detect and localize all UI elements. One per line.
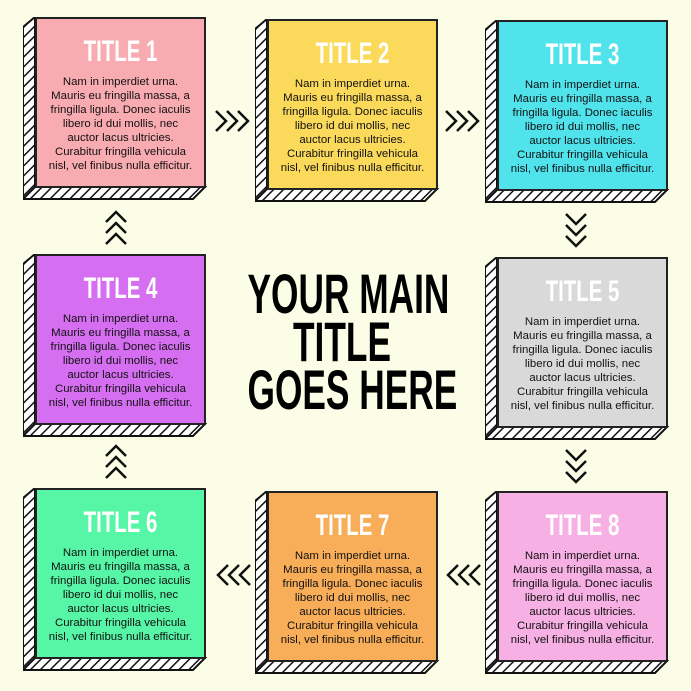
panel: title 7 — [255, 491, 439, 674]
panel: title 8: Nam in imperdiet urna. Mauris eu fringilla massa, a fringilla ligula. Donec iaculis libero id dui mollis, nec auctor lacus ultricies. Curabitur fringilla vehicula nisl, vel finibus nulla efficitur. — [511, 550, 654, 646]
panel: title 7: TITLE 7 — [316, 509, 389, 542]
panel: title 2: Nam in imperdiet urna. Mauris eu fringilla massa, a fringilla ligula. Donec iaculis libero id dui mollis, nec auctor lacus ultricies. Curabitur fringilla vehicula nisl, vel finibus nulla efficitur. — [281, 78, 424, 174]
panel: title 3: TITLE 3 — [546, 38, 619, 71]
panel: title 1: TITLE 1 — [84, 35, 157, 68]
panel: title 6 — [23, 488, 207, 672]
main title: GOES HERE — [248, 358, 457, 421]
arrow: 5 to 8 — [565, 449, 587, 484]
panel: title 4: Nam in imperdiet urna. Mauris eu fringilla massa, a fringilla ligula. Donec iaculis libero id dui mollis, nec auctor lacus ultricies. Curabitur fringilla vehicula nisl, vel finibus nulla efficitur. — [49, 313, 192, 409]
panel: title 3: Nam in imperdiet urna. Mauris eu fringilla massa, a fringilla ligula. Donec iaculis libero id dui mollis, nec auctor lacus ultricies. Curabitur fringilla vehicula nisl, vel finibus nulla efficitur. — [511, 79, 654, 175]
panel: title 6: TITLE 6 — [84, 506, 157, 539]
panel: title 5 — [485, 257, 669, 440]
panel: title 1 — [23, 17, 207, 200]
arrow: 7 to 6 — [216, 564, 251, 586]
panel: title 4 — [23, 254, 207, 438]
panel: title 7: Nam in imperdiet urna. Mauris eu fringilla massa, a fringilla ligula. Donec iaculis libero id dui mollis, nec auctor lacus ultricies. Curabitur fringilla vehicula nisl, vel finibus nulla efficitur. — [281, 550, 424, 646]
arrow: 8 to 7 — [446, 564, 481, 586]
arrow: 4 to 1 — [105, 210, 127, 245]
arrow: 6 to 4 — [105, 444, 127, 479]
panel: title 2 — [255, 19, 439, 202]
arrow: 3 to 5 — [565, 213, 587, 248]
main title: YOUR MAIN — [248, 262, 449, 325]
panel: title 4: TITLE 4 — [84, 272, 157, 305]
panel: title 5: Nam in imperdiet urna. Mauris eu fringilla massa, a fringilla ligula. Donec iaculis libero id dui mollis, nec auctor lacus ultricies. Curabitur fringilla vehicula nisl, vel finibus nulla efficitur. — [511, 316, 654, 412]
panel: title 8 — [485, 491, 669, 674]
main title: TITLE — [293, 310, 391, 373]
panel: title 5: TITLE 5 — [546, 275, 619, 308]
main title — [248, 262, 457, 421]
arrow: 1 to 2 — [215, 110, 250, 132]
panel: title 1: Nam in imperdiet urna. Mauris eu fringilla massa, a fringilla ligula. Donec iaculis libero id dui mollis, nec auctor lacus ultricies. Curabitur fringilla vehicula nisl, vel finibus nulla efficitur. — [49, 76, 192, 172]
arrow: 2 to 3 — [445, 110, 480, 132]
panel: title 3 — [485, 20, 669, 204]
panel: title 8: TITLE 8 — [546, 509, 619, 542]
panel: title 2: TITLE 2 — [316, 37, 389, 70]
panel: title 6: Nam in imperdiet urna. Mauris eu fringilla massa, a fringilla ligula. Donec iaculis libero id dui mollis, nec auctor lacus ultricies. Curabitur fringilla vehicula nisl, vel finibus nulla efficitur. — [49, 547, 192, 643]
